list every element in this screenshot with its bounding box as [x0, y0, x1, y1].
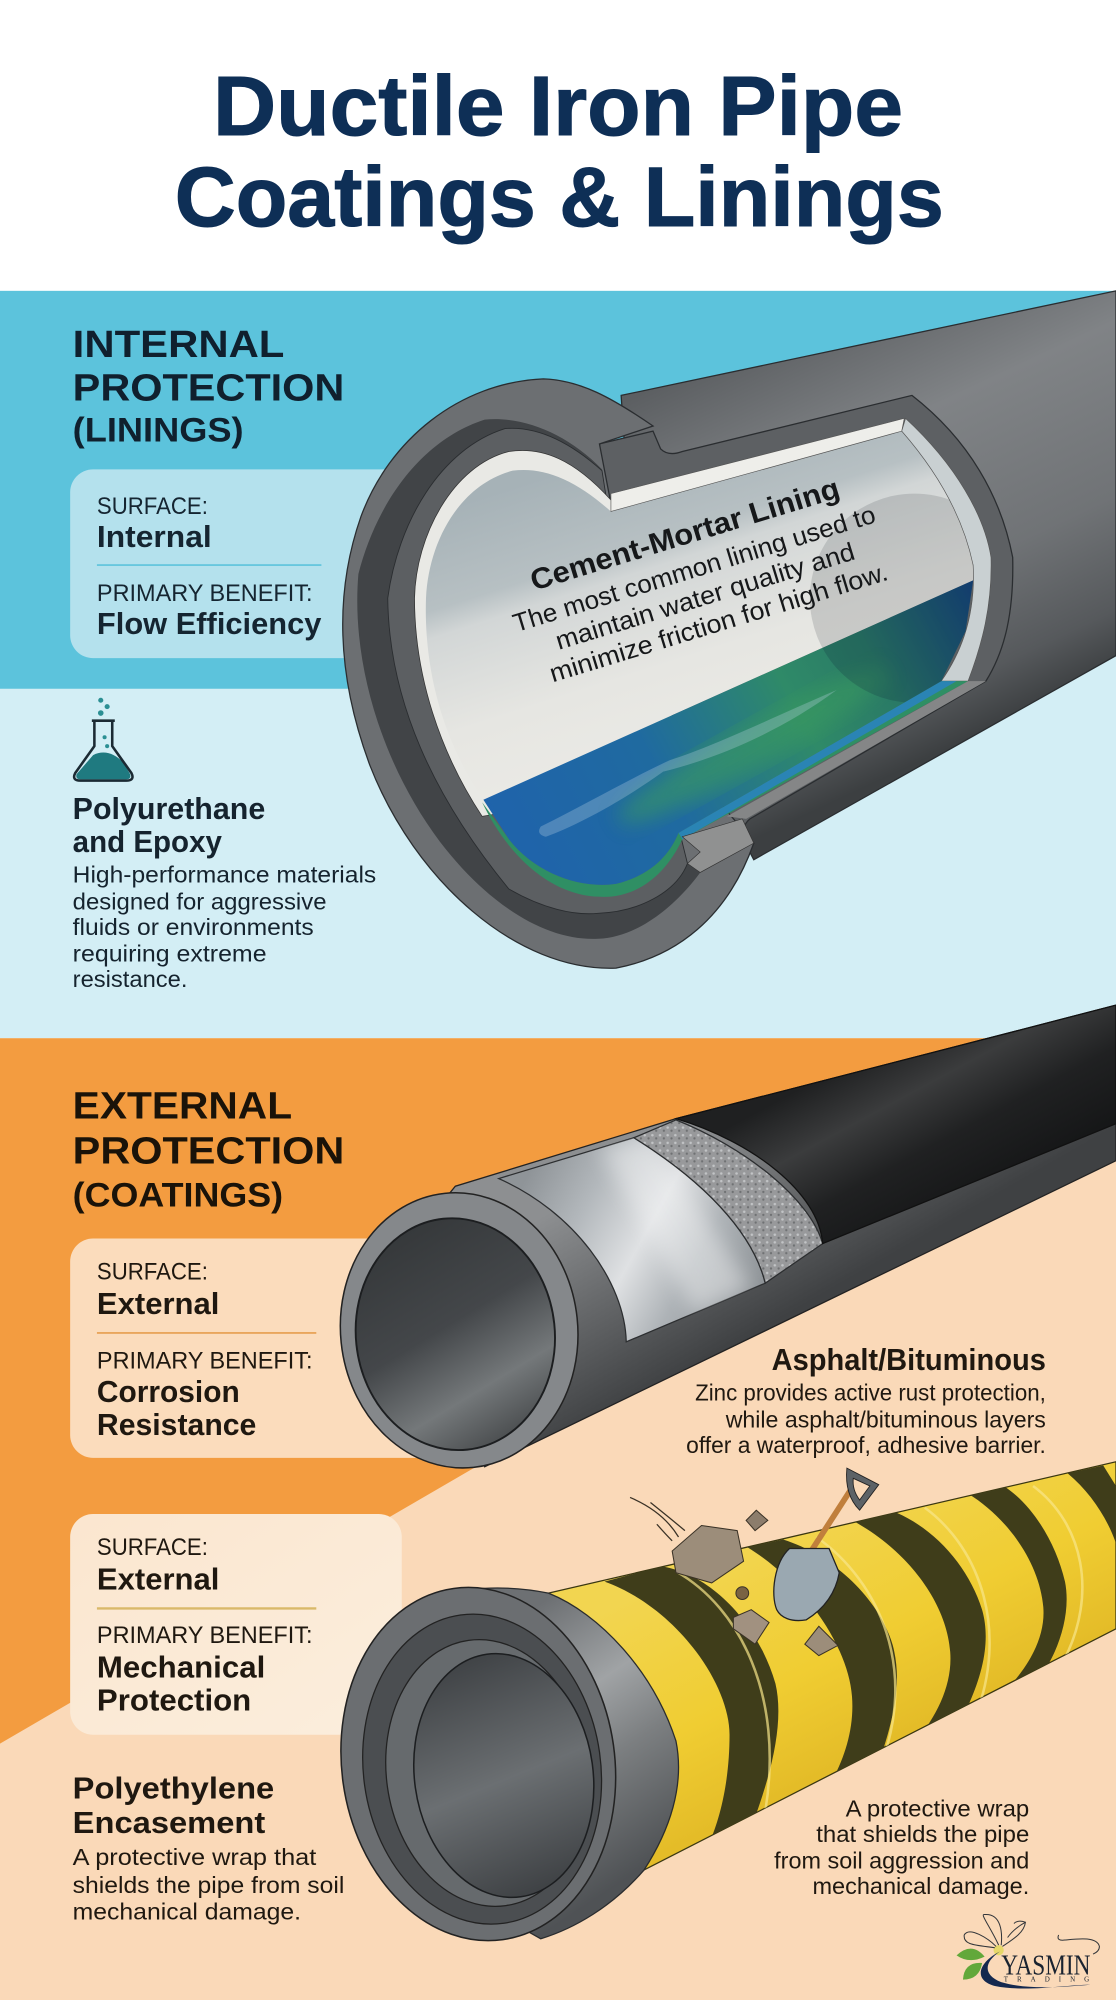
- mouth interior: [398, 1642, 609, 1909]
- text block: polyurethane and epoxy: [73, 792, 376, 992]
- text block: asphalt/bituminous: while asphalt/bituminous layers: [725, 1406, 1046, 1432]
- panel: mechanical stats card: Protection: [97, 1683, 251, 1717]
- title: Coatings & Linings: [175, 150, 944, 244]
- panel: corrosion stats card: Corrosion: [97, 1375, 240, 1409]
- top lining strip: [611, 418, 904, 511]
- speckled band: [634, 1120, 823, 1283]
- illustration: zinc and asphalt coated pipe: [327, 1005, 1116, 1480]
- logo: Yasmin Trading: YASMIN: [1001, 1950, 1090, 1981]
- text block: polyethylene encasement: [73, 1771, 344, 1925]
- panel: internal stats card: PRIMARY BENEFIT:: [97, 580, 312, 606]
- label: cement-mortar lining: Cement-Mortar Lining: [526, 472, 843, 597]
- label: cement-mortar lining: maintain water quality and: [552, 538, 858, 656]
- logo: Yasmin Trading: [957, 1914, 1099, 1989]
- text block: polyurethane and epoxy: and Epoxy: [73, 825, 222, 859]
- shovel: [774, 1468, 879, 1621]
- pipe body: [621, 291, 1116, 860]
- text block: asphalt/bituminous: [686, 1343, 1046, 1458]
- panel: internal stats card: Internal: [97, 520, 212, 554]
- panel: corrosion stats card: SURFACE:: [97, 1258, 208, 1284]
- text block: protective wrap: mechanical damage.: [812, 1873, 1029, 1899]
- text block: asphalt/bituminous: Asphalt/Bituminous: [772, 1343, 1046, 1377]
- illustration: polyethylene wrapped pipe: [318, 1462, 1116, 1959]
- yellow wrap body: [548, 1462, 1116, 1870]
- text block: polyurethane and epoxy: fluids or environments: [73, 914, 314, 940]
- mouth rim: [327, 1181, 592, 1480]
- silver highlight: [599, 1135, 753, 1314]
- flange face: [318, 1569, 638, 1959]
- heading: internal protection: (LININGS): [73, 411, 244, 449]
- panel: internal protection background: [0, 291, 1116, 1038]
- text block: polyurethane and epoxy: High-performance materials: [73, 862, 376, 888]
- label: cement-mortar lining: minimize friction for high flow.: [546, 558, 891, 688]
- heading: external protection: (COATINGS): [73, 1177, 283, 1215]
- text block: protective wrap: from soil aggression and: [774, 1848, 1029, 1874]
- text block: polyurethane and epoxy: Polyurethane: [73, 792, 265, 826]
- cut wall: [599, 395, 1013, 893]
- illustration: cement-mortar lined pipe cutaway: [343, 291, 1116, 968]
- text block: polyurethane and epoxy: requiring extreme: [73, 941, 267, 967]
- text block: polyethylene encasement: mechanical damage.: [73, 1899, 301, 1925]
- panel: corrosion stats card: PRIMARY BENEFIT:: [97, 1348, 312, 1374]
- yellow wrap highlights: [676, 1486, 1082, 1811]
- text block: protective wrap: that shields the pipe: [816, 1821, 1029, 1847]
- title: Ductile Iron Pipe: [213, 59, 903, 153]
- panel: external protection background: [0, 1038, 1116, 2000]
- panel: corrosion stats card: External: [97, 1287, 219, 1321]
- text block: polyethylene encasement: A protective wrap that: [73, 1844, 317, 1870]
- text block: protective wrap: A protective wrap: [846, 1795, 1029, 1821]
- heading: internal protection: [73, 323, 344, 449]
- text block: protective wrap: [774, 1795, 1029, 1899]
- dark wrap stripes: [605, 1466, 1116, 1843]
- flange outer: [343, 379, 754, 968]
- panel: internal stats card: [70, 469, 434, 658]
- motion lines: [630, 1497, 685, 1541]
- panel: corrosion stats card: Resistance: [97, 1408, 256, 1442]
- collar: [383, 1588, 679, 1939]
- inner lining surface: [426, 431, 973, 800]
- water highlight: [539, 690, 837, 837]
- heading: external protection: PROTECTION: [73, 1129, 344, 1172]
- flange dark ring: [343, 1599, 621, 1940]
- damage rocks: [672, 1510, 838, 1656]
- logo: Yasmin Trading: TRADING: [1004, 1976, 1089, 1984]
- mouth interior: [344, 1208, 566, 1460]
- heading: internal protection: INTERNAL: [73, 323, 284, 366]
- panel: corrosion stats card: [70, 1239, 440, 1458]
- label: cement-mortar lining: The most common lining used to: [510, 501, 879, 638]
- icon: flask: [74, 698, 133, 781]
- panel: mechanical stats card: Mechanical: [97, 1650, 265, 1684]
- panel: internal stats card: Flow Efficiency: [97, 607, 321, 641]
- heading: external protection: [73, 1085, 344, 1215]
- flange dark ring: [357, 419, 700, 939]
- gray ledge: [682, 819, 754, 872]
- silver zinc band: [499, 1138, 765, 1342]
- text block: polyurethane and epoxy: resistance.: [73, 966, 187, 992]
- label: cement-mortar lining: [498, 464, 896, 694]
- right lining rim: [902, 418, 991, 681]
- panel: mechanical stats card: PRIMARY BENEFIT:: [97, 1622, 312, 1648]
- water: [483, 580, 973, 885]
- pipe body: [383, 1005, 1116, 1467]
- panel: mechanical stats card: External: [97, 1562, 219, 1596]
- text block: polyethylene encasement: Polyethylene: [73, 1771, 274, 1805]
- flange mid ring: [388, 428, 687, 914]
- white rim: [415, 450, 765, 816]
- heading: external protection: EXTERNAL: [73, 1085, 292, 1128]
- far-end shading: [810, 494, 973, 648]
- black asphalt layer: [676, 1005, 1116, 1244]
- green lining edge: [482, 681, 968, 897]
- text block: asphalt/bituminous: Zinc provides active rust protection,: [695, 1380, 1046, 1406]
- panel: mechanical stats card: SURFACE:: [97, 1534, 208, 1560]
- panel: internal stats card: SURFACE:: [97, 493, 208, 519]
- title: [175, 59, 944, 244]
- flange mid ring: [369, 1626, 606, 1920]
- heading: internal protection: PROTECTION: [73, 367, 344, 410]
- text block: polyurethane and epoxy: designed for aggressive: [73, 888, 327, 914]
- text block: polyethylene encasement: shields the pipe from soil: [73, 1872, 344, 1898]
- panel: mechanical stats card: [70, 1514, 402, 1735]
- text block: asphalt/bituminous: offer a waterproof, adhesive barrier.: [686, 1432, 1046, 1458]
- text block: polyethylene encasement: Encasement: [73, 1806, 265, 1840]
